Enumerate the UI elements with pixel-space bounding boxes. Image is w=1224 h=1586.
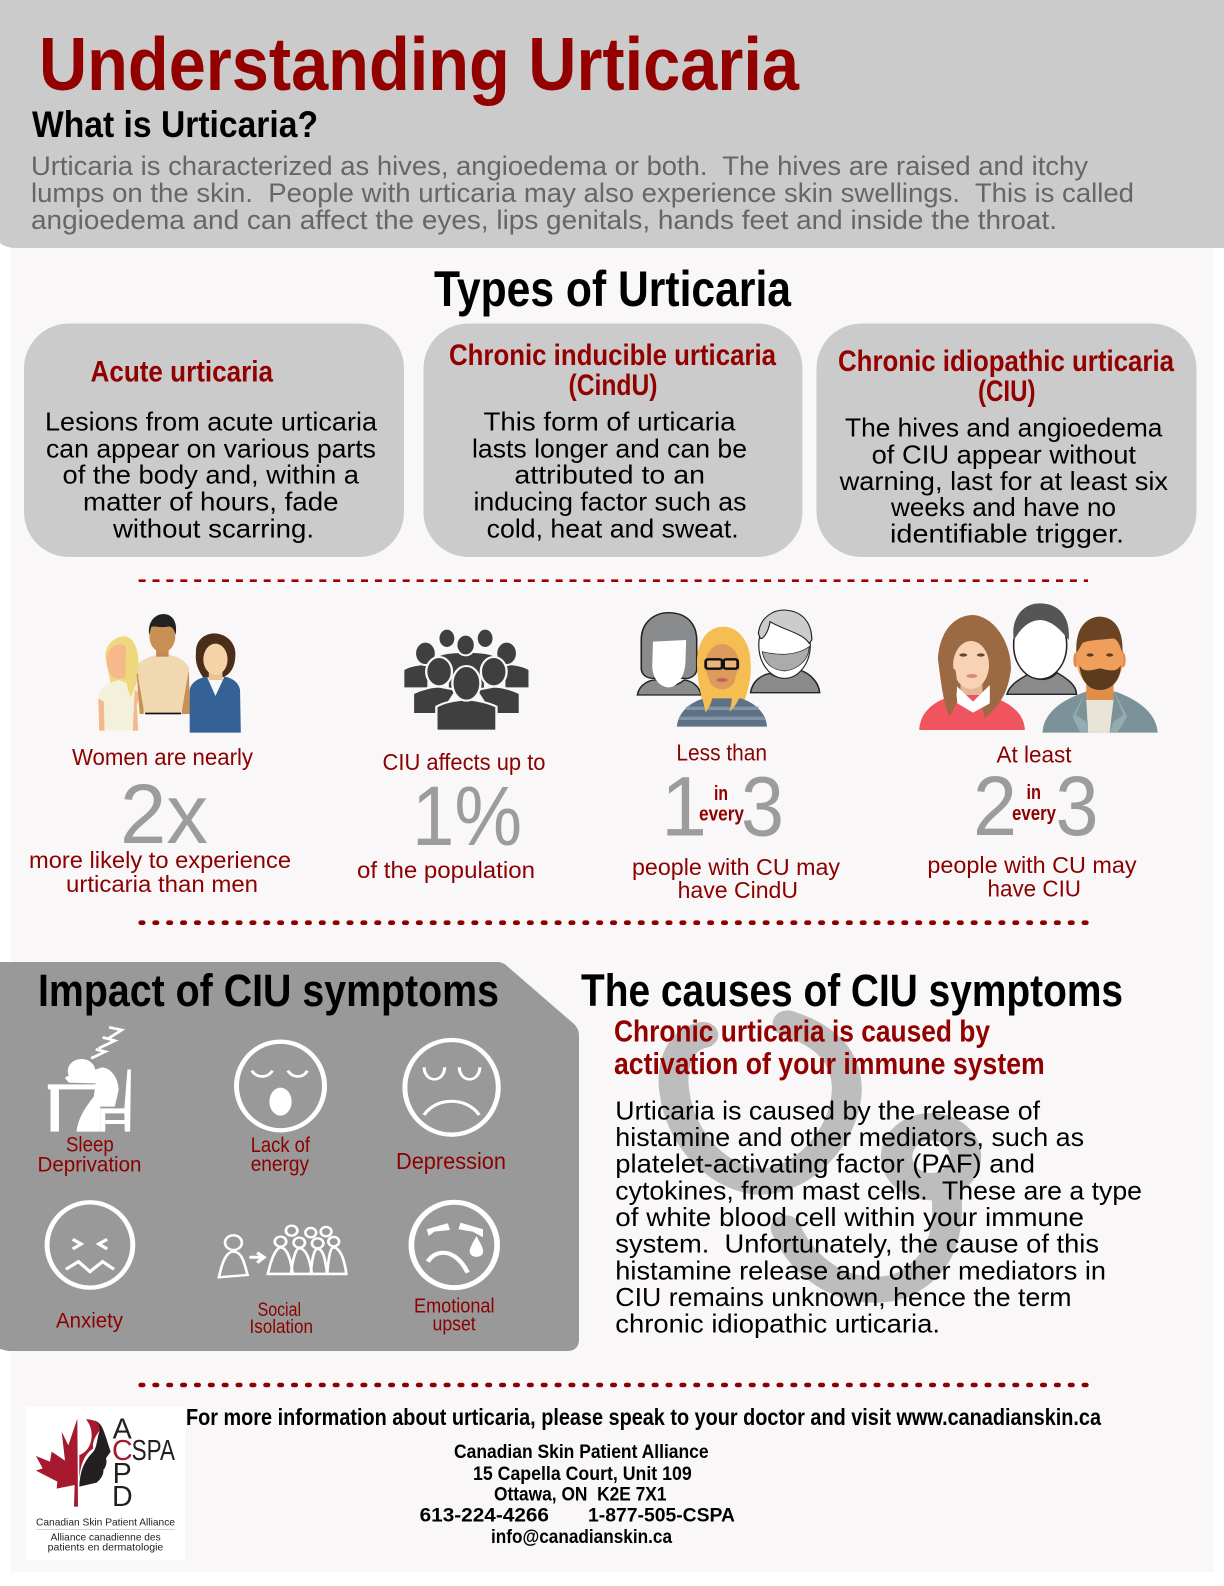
subheading: immune system: Chronic urticaria is caused by: [614, 1014, 991, 1049]
panel: acute urticaria: Acute urticaria: [90, 356, 273, 388]
footer call to action: For more information about urticaria, please speak to your doctor and visit www.canadianskin.ca: [186, 1404, 1101, 1430]
subheading: immune system: activation of your immune system: [614, 1046, 1045, 1081]
text block: causes body: Urticaria is caused by the release of: [615, 1095, 1041, 1125]
logo: Canadian Skin Patient Alliance: P: [113, 1458, 132, 1490]
stat: less than 1 in every 3: [632, 610, 841, 903]
text block: causes body: platelet-activating factor (PAF) and: [615, 1149, 1035, 1179]
panel: acute urticaria: of the body and, within a: [62, 459, 360, 489]
panel: chronic idiopathic urticaria: of CIU appear without: [872, 439, 1137, 469]
icon: three people: [98, 614, 241, 733]
subheading: what is urticaria: What is Urticaria?: [32, 104, 318, 145]
stat: less than 1 in every 3: Less than: [676, 740, 767, 766]
stat: at least 2 in every 3: 2: [973, 759, 1017, 853]
label: lack of energy: energy: [251, 1153, 309, 1176]
stat: less than 1 in every 3: people with CU may: [632, 854, 841, 880]
stat: women nearly 2x: Women are nearly: [72, 744, 253, 770]
panel: chronic idiopathic urticaria: The hives and angioedema: [845, 413, 1163, 443]
stat: at least 2 in every 3: people with CU may: [927, 852, 1137, 878]
intro paragraph: Urticaria is characterized as hives, angioedema or both. The hives are raised and itchy: [31, 151, 1089, 181]
contact details: 1-877-505-CSPA: [588, 1506, 735, 1527]
contact details: Ottawa, ON K2E 7X1: [494, 1485, 667, 1506]
icon: crying face: [411, 1202, 497, 1288]
panel: chronic idiopathic urticaria: identifiable trigger.: [890, 519, 1124, 549]
label: lack of energy: [251, 1134, 310, 1176]
logo: Canadian Skin Patient Alliance: SPA: [132, 1435, 176, 1467]
panel: chronic idiopathic urticaria: (CIU): [978, 375, 1036, 408]
icon: social isolation: [219, 1226, 346, 1277]
header panel: [0, 0, 1224, 248]
logo: Canadian Skin Patient Alliance: [26, 1407, 186, 1560]
stat: less than 1 in every 3: every: [699, 804, 745, 826]
panel: chronic inducible urticaria: Chronic inducible urticaria: [449, 339, 776, 372]
stat: at least 2 in every 3: every: [1012, 803, 1057, 825]
contact details: 15 Capella Court, Unit 109: [473, 1464, 692, 1485]
label: emotional upset: [414, 1296, 494, 1336]
panel: acute urticaria: can appear on various parts: [46, 433, 376, 463]
stat: at least 2 in every 3: have CIU: [988, 876, 1081, 902]
icon: yawning face: [237, 1042, 325, 1130]
stat: at least 2 in every 3: 3: [1056, 759, 1098, 853]
panel: chronic idiopathic urticaria: [816, 324, 1196, 557]
panel: acute urticaria: without scarring.: [112, 513, 314, 543]
subheading: immune system: [614, 1014, 1045, 1081]
text block: causes body: histamine release and other mediators in: [615, 1255, 1106, 1285]
intro paragraph: lumps on the skin. People with urticaria may also experience skin swellings. This is called: [31, 178, 1134, 208]
panel: chronic inducible urticaria: attributed to an: [514, 459, 705, 489]
label: emotional upset: upset: [432, 1314, 476, 1336]
icon: stethoscope watermark: [674, 1023, 965, 1290]
intro paragraph: angioedema and can affect the eyes, lips genitals, hands feet and inside the throat.: [31, 205, 1057, 235]
panel: chronic idiopathic urticaria: warning, last for at least six: [839, 466, 1168, 496]
logo: Canadian Skin Patient Alliance: D: [112, 1481, 133, 1513]
stat: women nearly 2x: urticaria than men: [66, 871, 258, 897]
panel: chronic inducible urticaria: cold, heat and sweat.: [487, 513, 739, 543]
contact details: info@canadianskin.ca: [491, 1527, 672, 1548]
panel: causes of CIU symptoms: [581, 965, 1142, 1339]
panel: acute urticaria: [24, 324, 404, 557]
logo: Canadian Skin Patient Alliance: A: [113, 1413, 133, 1445]
stat: CIU affects 1 percent: of the population: [357, 857, 535, 883]
label: social isolation: Social: [258, 1300, 301, 1321]
heading: impact: Impact of CIU symptoms: [38, 965, 499, 1016]
stat: CIU affects 1 percent: CIU affects up to: [382, 749, 546, 775]
text block: causes body: chronic idiopathic urticaria.: [615, 1309, 940, 1339]
label: emotional upset: Emotional: [414, 1296, 494, 1318]
logo: Canadian Skin Patient Alliance: Alliance canadienne des: [51, 1533, 161, 1544]
stat: CIU affects 1 percent: 1%: [412, 769, 522, 863]
contact details: 613-224-4266: [420, 1506, 549, 1527]
stat: CIU affects 1 percent: [357, 629, 546, 883]
panel: chronic inducible urticaria: lasts longer and can be: [472, 433, 747, 463]
contact details: [420, 1442, 735, 1548]
logo: Canadian Skin Patient Alliance: patients en dermatologie: [48, 1543, 163, 1554]
text block: causes body: cytokines, from mast cells. These are a type: [615, 1175, 1142, 1205]
text block: causes body: [615, 1095, 1142, 1339]
label: social isolation: Isolation: [250, 1317, 313, 1338]
panel: chronic inducible urticaria: inducing factor such as: [474, 487, 746, 517]
stat: women nearly 2x: 2x: [120, 767, 208, 861]
logo: Canadian Skin Patient Alliance: C: [112, 1435, 133, 1467]
panel: impact of CIU symptoms: [0, 962, 579, 1351]
text block: causes body: CIU remains unknown, hence the term: [615, 1282, 1072, 1312]
label: sleep deprivation: [38, 1134, 142, 1177]
stat: less than 1 in every 3: 3: [741, 760, 784, 854]
label: lack of energy: Lack of: [251, 1134, 310, 1157]
stat: less than 1 in every 3: have CindU: [678, 877, 798, 903]
panel: chronic inducible urticaria: This form of urticaria: [484, 407, 736, 437]
contact details: Canadian Skin Patient Alliance: [454, 1442, 709, 1463]
stat: women nearly 2x: more likely to experience: [29, 847, 291, 873]
panel: chronic idiopathic urticaria: Chronic idiopathic urticaria: [838, 345, 1174, 378]
icon: anxious face: [47, 1202, 133, 1288]
label: depression: Depression: [396, 1148, 506, 1174]
panel: chronic inducible urticaria: (CindU): [568, 369, 658, 402]
label: sleep deprivation: Deprivation: [38, 1154, 142, 1177]
stat: at least 2 in every 3: At least: [996, 742, 1072, 768]
heading: types of urticaria: Types of Urticaria: [434, 261, 792, 317]
icon: sad face: [405, 1040, 498, 1135]
text block: causes body: system. Unfortunately, the cause of this: [615, 1229, 1099, 1259]
icon: crowd: [404, 629, 528, 731]
panel: chronic idiopathic urticaria: weeks and have no: [890, 492, 1116, 522]
stat: at least 2 in every 3: in: [1026, 782, 1041, 804]
panel: chronic inducible urticaria: [424, 324, 802, 557]
label: sleep deprivation: Sleep: [66, 1134, 114, 1157]
text block: causes body: of white blood cell within your immune: [615, 1202, 1084, 1232]
panel: acute urticaria: Lesions from acute urticaria: [45, 407, 378, 437]
icon: three people with beard: [919, 603, 1158, 733]
label: anxiety: Anxiety: [56, 1310, 123, 1333]
stat: at least 2 in every 3: [919, 603, 1158, 902]
stat: less than 1 in every 3: in: [714, 783, 728, 805]
title: Understanding Urticaria: [39, 22, 800, 106]
icon: three people with glasses: [637, 610, 820, 727]
logo: Canadian Skin Patient Alliance: Canadian Skin Patient Alliance: [36, 1518, 175, 1529]
intro paragraph: [31, 151, 1134, 235]
text block: causes body: histamine and other mediators, such as: [615, 1122, 1084, 1152]
panel: acute urticaria: matter of hours, fade: [83, 487, 338, 517]
heading: causes: The causes of CIU symptoms: [581, 965, 1123, 1016]
stat: women nearly 2x: [29, 614, 291, 897]
stat: less than 1 in every 3: 1: [661, 760, 707, 854]
label: social isolation: [250, 1300, 313, 1338]
icon: sleeping at desk: [48, 1027, 131, 1132]
